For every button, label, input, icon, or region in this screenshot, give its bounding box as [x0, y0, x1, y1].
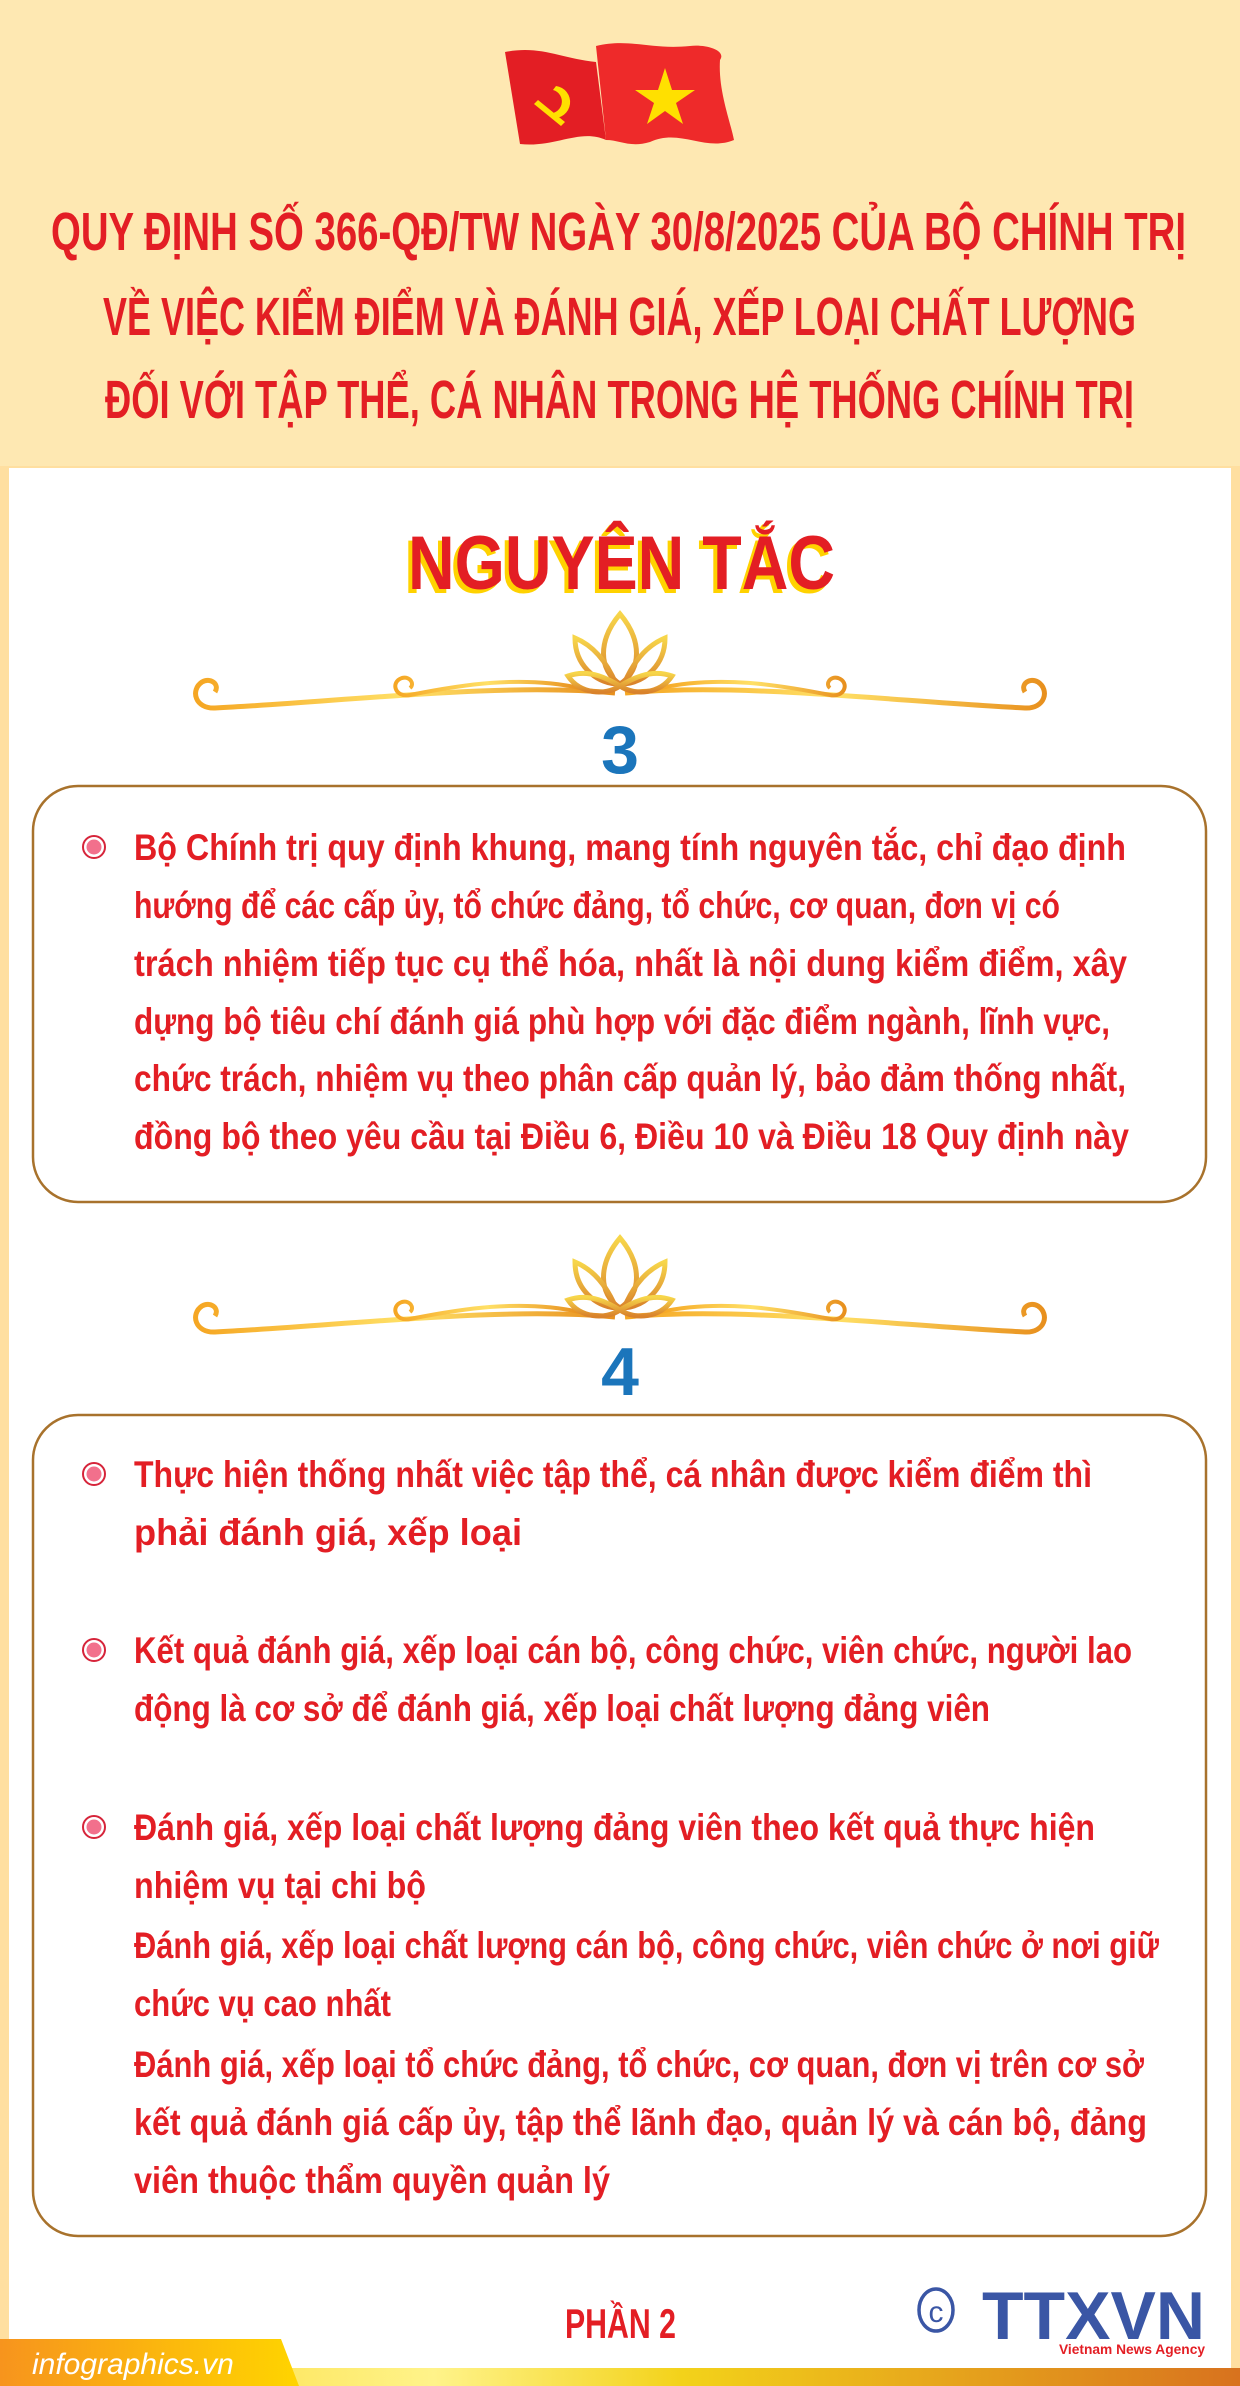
text block: hướng để các cấp ủy, tổ chức đảng, tổ chức, cơ quan, đơn vị có [134, 885, 1060, 926]
text block: Đánh giá, xếp loại chất lượng đảng viên theo kết quả thực hiện [134, 1807, 1095, 1848]
panel: principle 4 [33, 1415, 1206, 2236]
footer tab: infographics.vn [0, 2339, 299, 2386]
ornament 2 [196, 1238, 1044, 1332]
title [51, 201, 1186, 430]
text block [134, 826, 1129, 1157]
logo: copyright TTXVN: TTXVN [982, 2278, 1205, 2354]
bullet 2 [83, 1639, 105, 1661]
footer bar [0, 2368, 1240, 2386]
ornament 1 [196, 614, 1044, 708]
text block: Bộ Chính trị quy định khung, mang tính nguyên tắc, chỉ đạo định [134, 826, 1126, 868]
number 3: 3 [601, 712, 639, 788]
bullet 1 [83, 1463, 105, 1485]
bullet [83, 836, 105, 858]
footer: part label: PHẦN 2 [565, 2300, 676, 2347]
text block: Thực hiện thống nhất việc tập thể, cá nhân được kiểm điểm thì [134, 1454, 1092, 1495]
panel: principle 3 [33, 786, 1206, 1202]
white content panel [9, 468, 1231, 2368]
text block: động là cơ sở để đánh giá, xếp loại chất lượng đảng viên [134, 1688, 990, 1729]
heading: NGUYÊN TẮC: NGUYÊN TẮC [408, 520, 835, 606]
logo: copyright TTXVN: Vietnam News Agency [1059, 2341, 1205, 2357]
icon: flags [505, 43, 734, 145]
footer tab: infographics.vn: infographics.vn [32, 2348, 234, 2381]
heading: NGUYÊN TẮC: NGUYÊN TẮC [404, 524, 831, 610]
text block: trách nhiệm tiếp tục cụ thể hóa, nhất là nội dung kiểm điểm, xây [134, 943, 1127, 984]
bullet 3 [83, 1816, 105, 1838]
text block: chức vụ cao nhất [134, 1983, 391, 2024]
logo: copyright TTXVN: c [928, 2296, 944, 2329]
text block [134, 1454, 1159, 2201]
number 4: 4 [601, 1334, 639, 1410]
text block: phải đánh giá, xếp loại [134, 1512, 522, 1553]
text block: nhiệm vụ tại chi bộ [134, 1865, 426, 1906]
text block: viên thuộc thẩm quyền quản lý [134, 2160, 610, 2201]
